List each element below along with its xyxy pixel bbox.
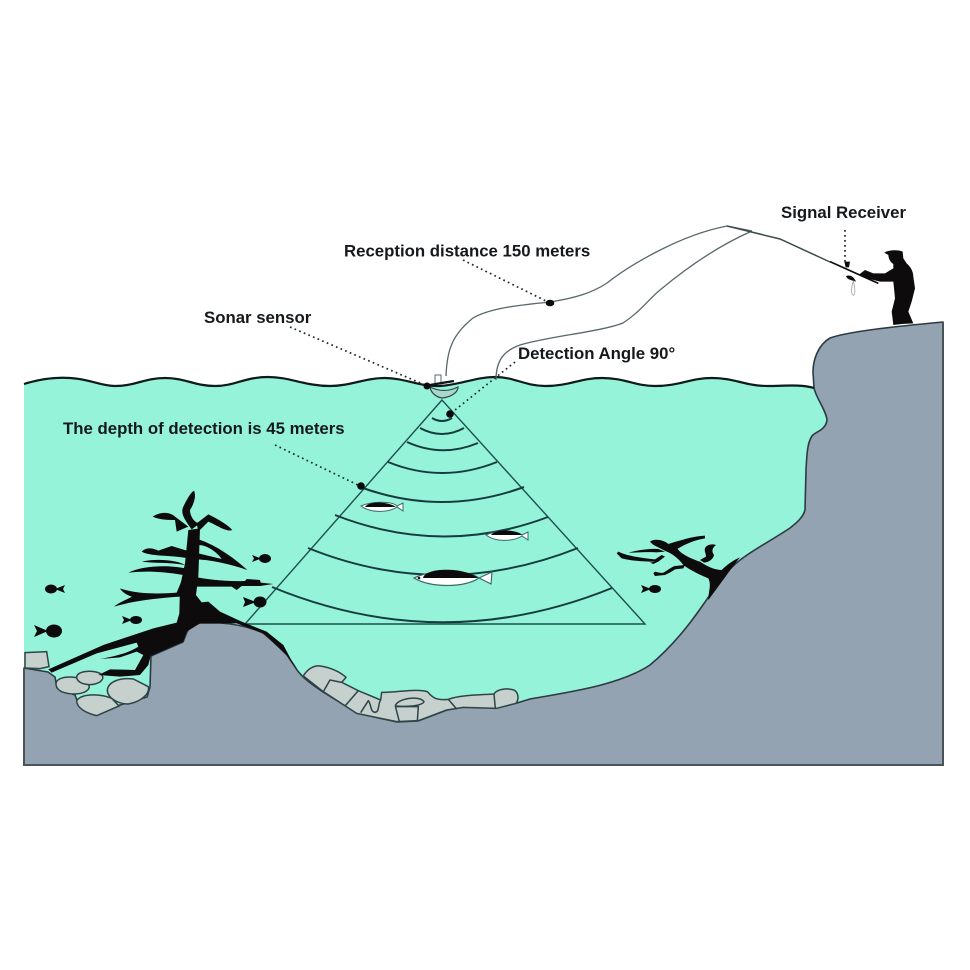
water body [24, 377, 832, 765]
label: reception distance: Reception distance 150 meters [344, 242, 590, 260]
tree right [617, 536, 740, 600]
sonar arcs [272, 418, 612, 622]
label: depth of detection: The depth of detection is 45 meters [63, 419, 345, 438]
fish silhouettes [34, 554, 661, 638]
fish in beam: small upper [361, 502, 403, 511]
surface line [24, 377, 814, 388]
label: signal receiver: Signal Receiver [781, 203, 906, 222]
fish 6 [641, 585, 661, 593]
callout dots [256, 300, 554, 606]
frame edges [24, 322, 943, 765]
label: sonar sensor: Sonar sensor [204, 308, 312, 327]
fish 2 [45, 584, 65, 594]
ground [24, 322, 943, 765]
rocks centre [303, 666, 518, 722]
fish in beam: large [414, 570, 492, 586]
cables [446, 226, 752, 380]
label: detection angle: Detection Angle 90° [518, 344, 675, 363]
rocks left [25, 652, 149, 716]
fish 1 [252, 554, 271, 563]
fish 5 [243, 596, 266, 608]
fish 3 [34, 624, 62, 638]
fish 4 [122, 616, 142, 624]
tree left [48, 491, 297, 677]
fish in beam: small right [486, 530, 528, 540]
callout leader lines [275, 230, 845, 486]
cone beam [245, 400, 645, 624]
fisherman [830, 250, 915, 325]
fishing rod [727, 226, 830, 262]
sonar boat [430, 375, 458, 398]
detection cone outline [245, 400, 645, 624]
